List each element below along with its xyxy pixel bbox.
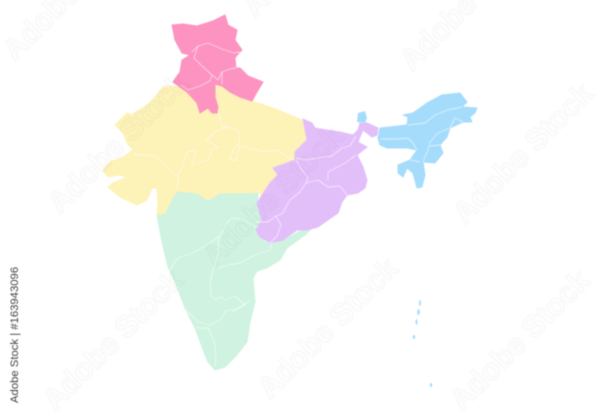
region: sikkim — [357, 111, 367, 123]
region: east (purple) — [256, 119, 378, 243]
region: south (mint) — [157, 191, 312, 370]
credit text: Adobe Stock | #163943096 — [9, 267, 21, 403]
region: north (pink) — [172, 15, 263, 113]
region: central and west (yellow) — [103, 84, 307, 215]
watermarks: Adobe Stock — [42, 67, 195, 220]
region: northeast (blue) — [357, 93, 477, 188]
watermarks: Adobe Stock — [197, 120, 350, 273]
watermarks: Adobe Stock — [447, 77, 600, 230]
islands — [413, 300, 432, 387]
watermarks: Adobe Stock — [252, 252, 405, 405]
